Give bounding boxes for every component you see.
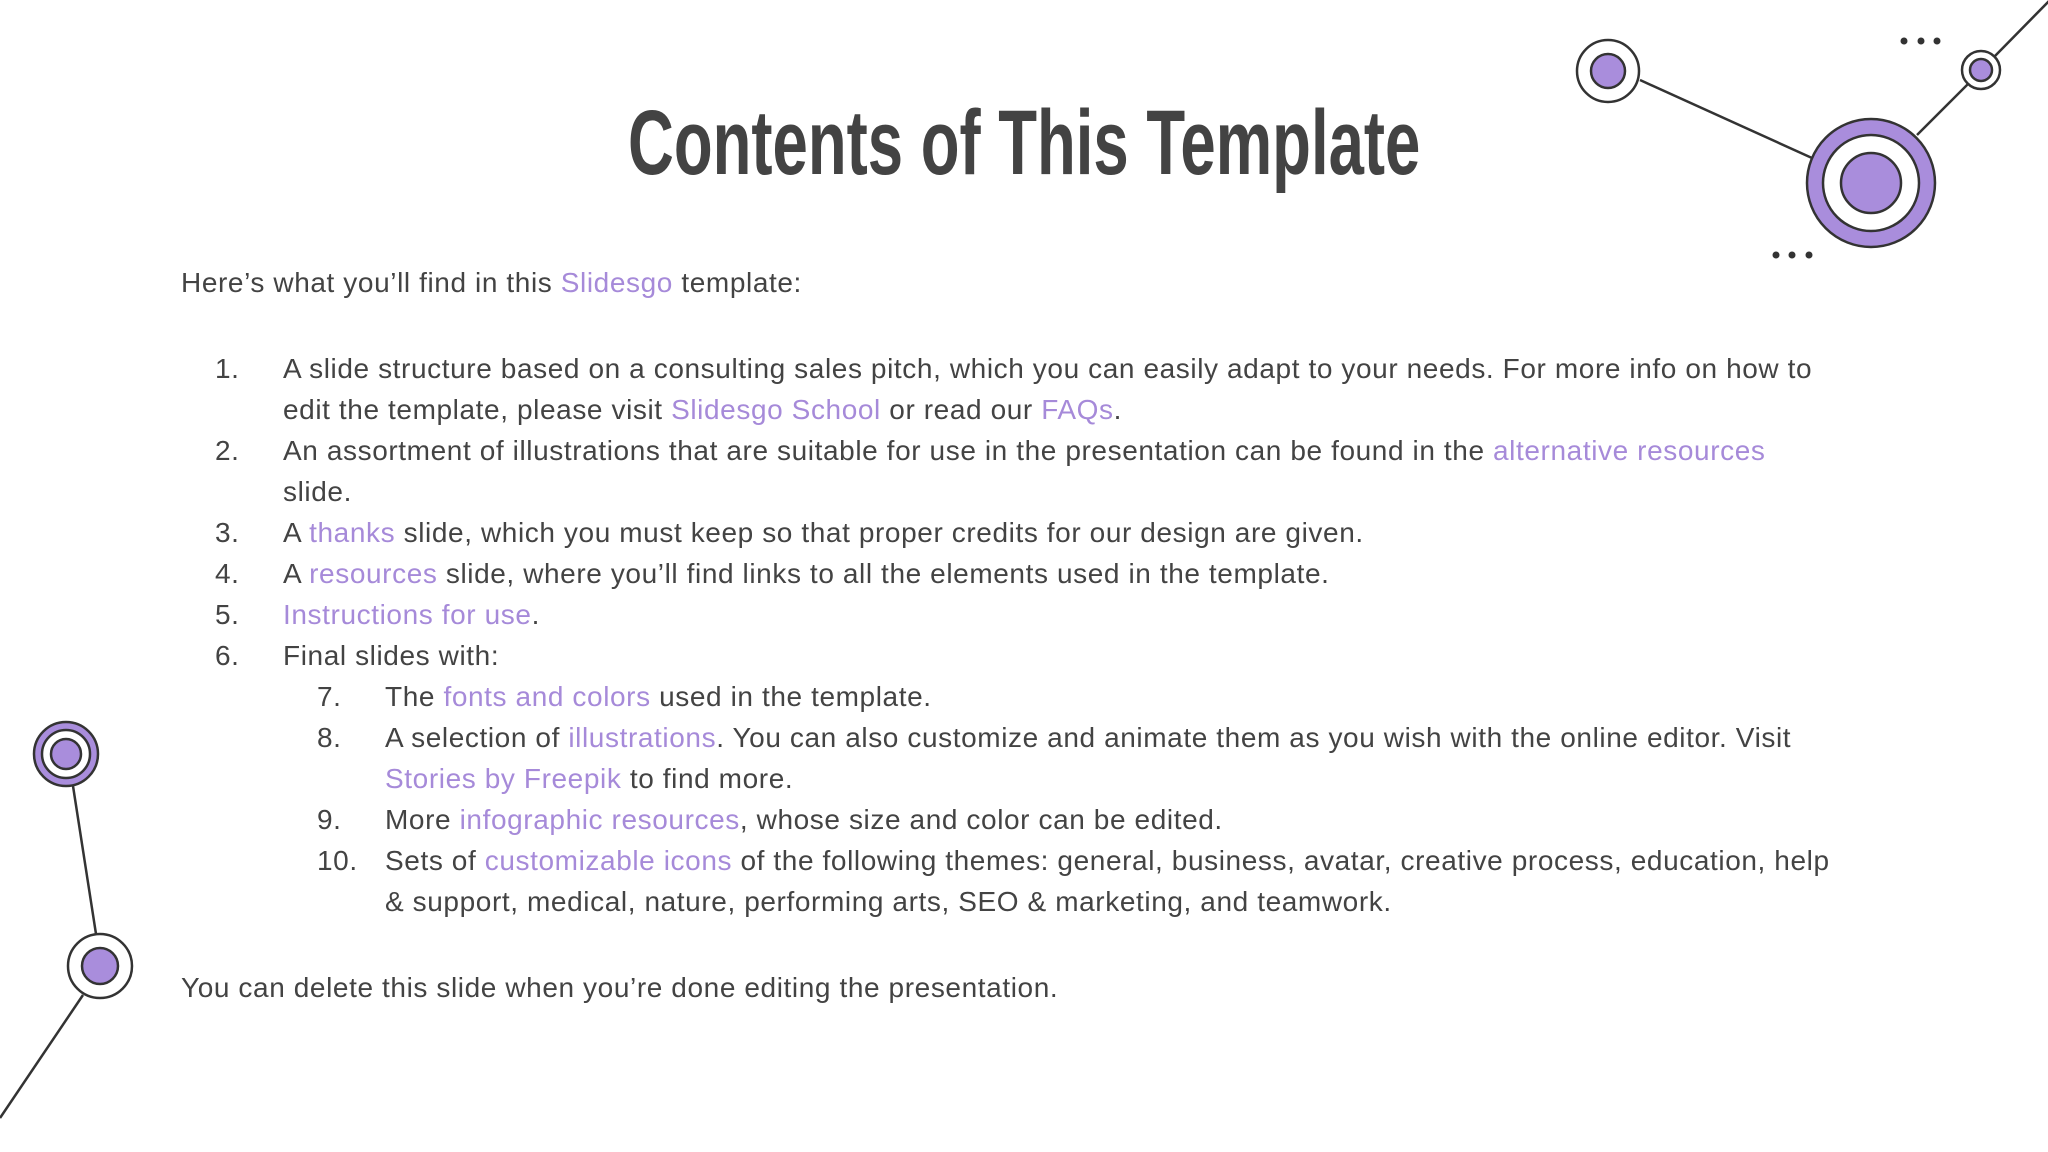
list: More infographic resources, whose size and color can be edited. <box>385 804 1223 835</box>
list: 5. <box>215 599 240 630</box>
list: 4. <box>215 558 240 589</box>
list: A thanks slide, which you must keep so that proper credits for our design are given. <box>283 517 1364 548</box>
list: Sets of customizable icons of the following themes: general, business, avatar, creative process, education, help <box>385 845 1830 876</box>
list: Stories by Freepik to find more. <box>385 763 793 794</box>
list: 2. <box>215 435 240 466</box>
list: 9. <box>317 804 342 835</box>
list: 3. <box>215 517 240 548</box>
list: & support, medical, nature, performing arts, SEO & marketing, and teamwork. <box>385 886 1392 917</box>
list: A resources slide, where you’ll find links to all the elements used in the template. <box>283 558 1330 589</box>
list: Final slides with: <box>283 640 499 671</box>
intro text: Here’s what you’ll find in this Slidesgo template: <box>181 267 802 298</box>
list: 7. <box>317 681 342 712</box>
list: edit the template, please visit Slidesgo School or read our FAQs. <box>283 394 1122 425</box>
list: Instructions for use. <box>283 599 540 630</box>
list: An assortment of illustrations that are suitable for use in the presentation can be found in the alternative resources <box>283 435 1766 466</box>
list: A selection of illustrations. You can also customize and animate them as you wish with the online editor. Visit <box>385 722 1791 753</box>
list: slide. <box>283 476 352 507</box>
list: 8. <box>317 722 342 753</box>
list: 6. <box>215 640 240 671</box>
list: A slide structure based on a consulting sales pitch, which you can easily adapt to your needs. For more info on how to <box>283 353 1812 384</box>
list: The fonts and colors used in the template. <box>385 681 932 712</box>
list: 1. <box>215 353 240 384</box>
list: 10. <box>317 845 358 876</box>
closing text: You can delete this slide when you’re done editing the presentation. <box>181 972 1058 1003</box>
title: Contents of This Template <box>628 92 1420 194</box>
